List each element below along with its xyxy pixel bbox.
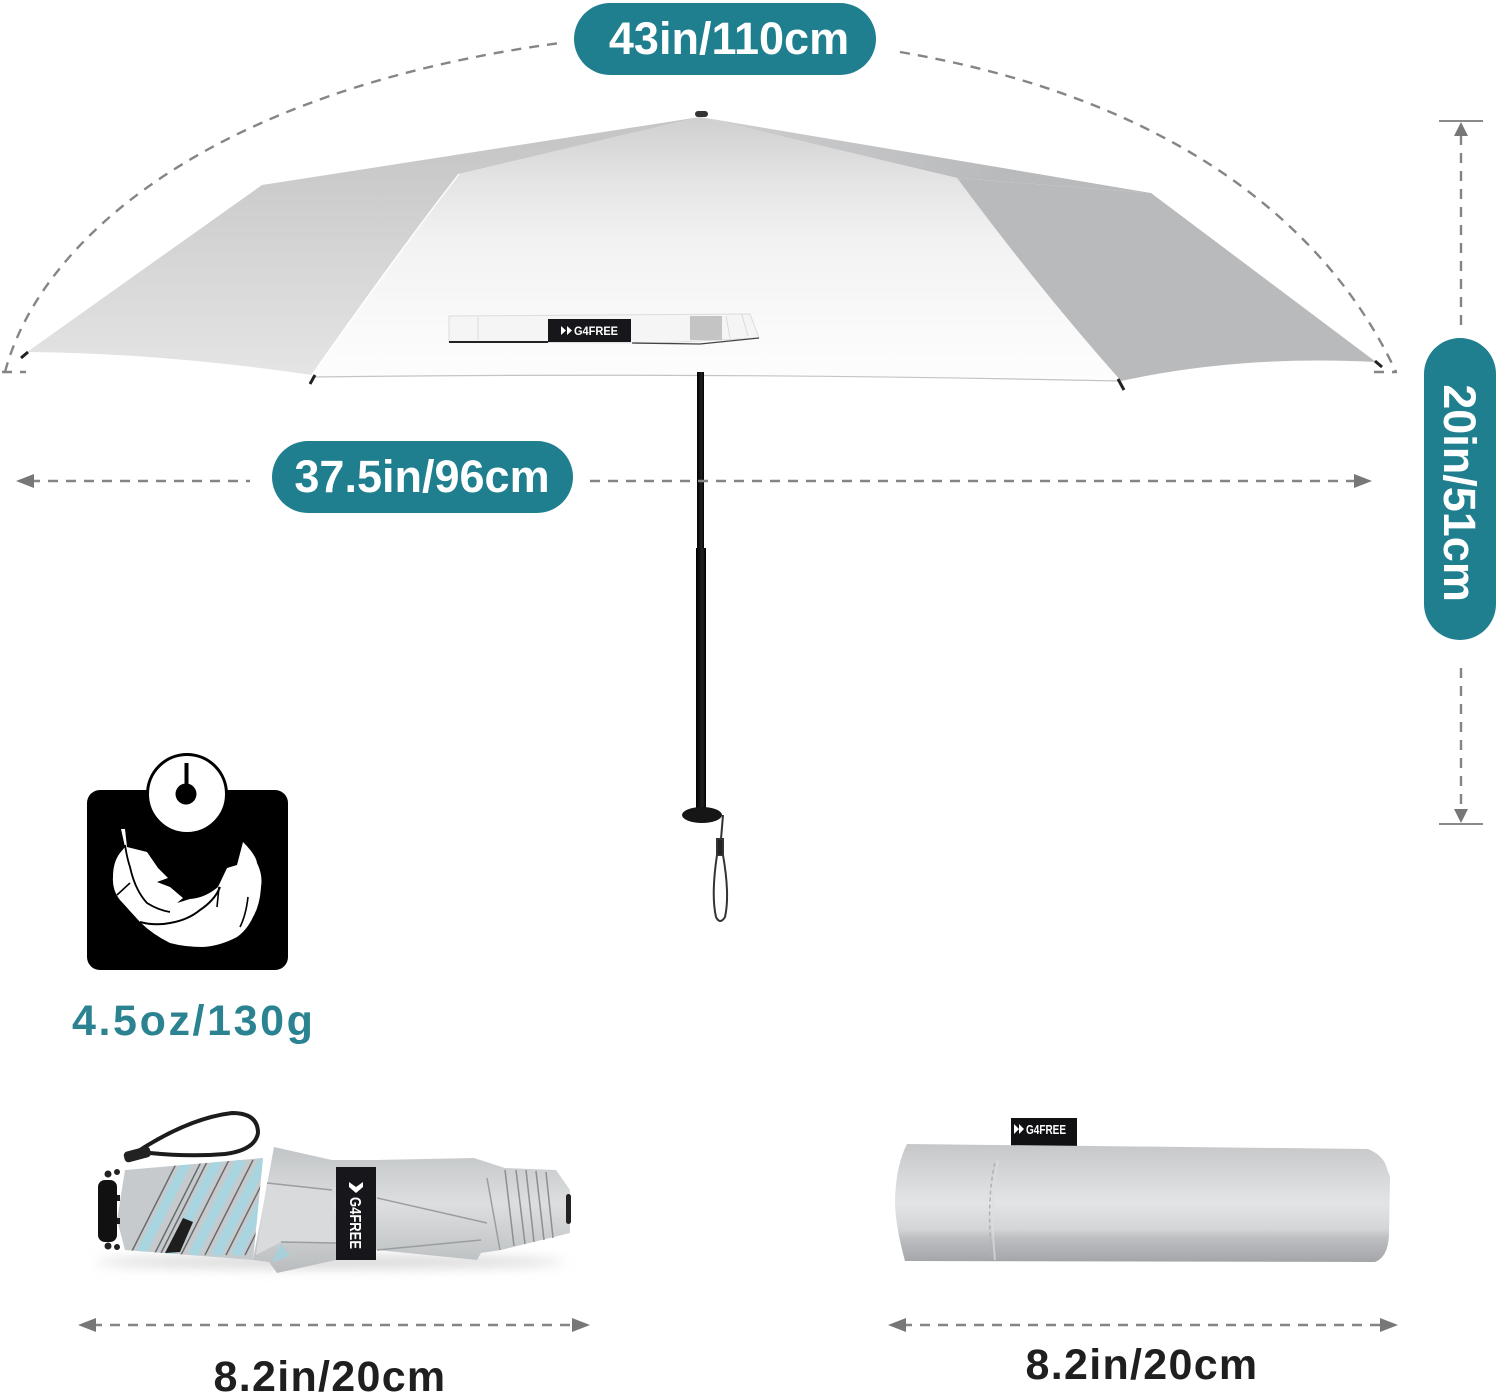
silver folded body [253, 1147, 570, 1273]
label strap [449, 314, 759, 343]
label: 20in/51cm with vertical dimension [1424, 121, 1496, 824]
sleeve size label: 8.2in/20cm [1026, 1341, 1258, 1389]
brand tag: G4FREE [574, 324, 618, 338]
icon: weight scale with feather [87, 754, 288, 970]
wrist strap [140, 1113, 258, 1155]
strap with brand [336, 1167, 376, 1260]
label: 20in/51cm with vertical dimension: 20in/51cm [1434, 384, 1485, 602]
weight label: 4.5oz/130g [72, 997, 316, 1045]
umbrella in sleeve photo: G4FREE [1026, 1122, 1066, 1137]
canopy seams [312, 375, 1121, 381]
handle end [98, 1180, 117, 1242]
brand tag [548, 319, 631, 342]
dimension: 37.5in/96cm [16, 441, 1372, 513]
rib tips [21, 352, 1382, 390]
canopy right panel [957, 178, 1376, 381]
folded umbrella dimension [78, 1318, 590, 1332]
sleeve body [895, 1144, 1390, 1262]
ferrule [695, 111, 708, 117]
tag [1011, 1118, 1077, 1146]
folded umbrella photo: G4FREE [346, 1197, 363, 1249]
umbrella: open canopy [21, 111, 1382, 390]
wrist loop [714, 815, 727, 921]
canopy upper right strip [700, 117, 1151, 193]
canopy left panel [27, 117, 700, 375]
feather [113, 829, 262, 947]
striped sleeve [117, 1158, 263, 1260]
umbrella shaft and handle [682, 372, 727, 921]
dimension: 37.5in/96cm: 37.5in/96cm [294, 451, 550, 502]
label: 43in/110cm: 43in/110cm [609, 13, 849, 64]
sleeve dimension [888, 1318, 1398, 1332]
umbrella in sleeve photo [895, 1118, 1390, 1262]
dashed arc: canopy circumference [2, 43, 1397, 372]
handle base [682, 807, 722, 823]
label: 43in/110cm [574, 3, 876, 75]
canopy centre panel [312, 117, 1121, 381]
ribbed end [505, 1170, 553, 1246]
folded umbrella photo [95, 1113, 571, 1273]
